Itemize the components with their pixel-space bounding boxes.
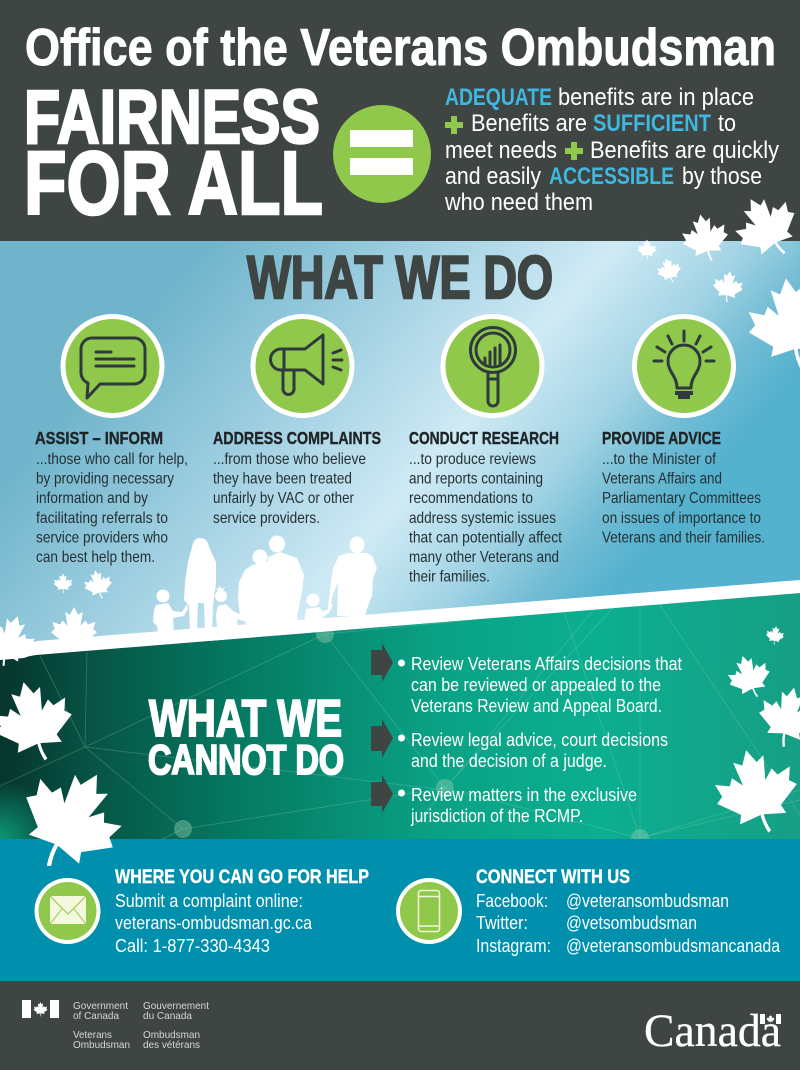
list: cannot do items: Review legal advice, court decisions xyxy=(411,729,668,750)
illustration: family silhouette xyxy=(153,536,377,632)
text block: fairness definition: to xyxy=(718,110,736,137)
heading: fairness for all xyxy=(24,75,323,234)
text block: conduct research: ...to produce reviews xyxy=(409,451,536,468)
heading: what we cannot do: CANNOT DO xyxy=(148,736,344,783)
text block: conduct research: CONDUCT RESEARCH xyxy=(409,428,559,448)
icons: maple leaves right of green panel xyxy=(706,625,800,843)
text block: provide advice: PROVIDE ADVICE xyxy=(602,428,721,448)
text block: government signature: des vétérans xyxy=(143,1039,200,1051)
text block: where you can go for help: Submit a complaint online: xyxy=(115,891,303,911)
list: cannot do items xyxy=(398,653,682,826)
text block: fairness definition: meet needs xyxy=(445,137,557,164)
text block: provide advice: Parliamentary Committees xyxy=(602,490,761,507)
text block: assist inform: service providers who xyxy=(36,529,168,546)
text block: provide advice: on issues of importance to xyxy=(602,510,761,527)
text block: where you can go for help: Call: 1-877-330-4343 xyxy=(115,936,270,956)
text block: address complaints: unfairly by VAC or other xyxy=(213,490,355,507)
list: cannot do items: jurisdiction of the RCMP. xyxy=(410,805,583,826)
text block: government signature: Gouvernement xyxy=(143,1000,209,1012)
icon: megaphone xyxy=(250,314,354,418)
text block: fairness definition: ADEQUATE xyxy=(445,84,552,111)
text block: assist inform: ASSIST – INFORM xyxy=(35,428,163,448)
list: cannot do items: Review Veterans Affairs decisions that xyxy=(411,653,682,674)
text block: provide advice xyxy=(602,428,765,546)
text block: government signature: du Canada xyxy=(143,1010,192,1022)
panel: what we do background xyxy=(0,241,800,641)
text block: provide advice: ...to the Minister of xyxy=(602,451,716,468)
text block: provide advice: Veterans Affairs and xyxy=(602,471,722,488)
text block: conduct research: their families. xyxy=(409,569,490,586)
text block: address complaints: ...from those who believe xyxy=(213,451,366,468)
text block: connect with us: @veteransombudsman xyxy=(566,891,729,911)
arrow 3 xyxy=(371,775,393,813)
logo: Canada wordmark: Canada xyxy=(644,1005,781,1057)
text block: assist inform: by providing necessary xyxy=(36,471,174,488)
panel: footer xyxy=(0,981,800,1070)
text block: connect with us: CONNECT WITH US xyxy=(476,866,630,888)
heading: what we do: WHAT WE DO xyxy=(247,244,553,311)
band: white slanted divider xyxy=(0,580,800,660)
text block: assist inform: facilitating referrals to xyxy=(36,510,168,527)
text block: where you can go for help: veterans-ombudsman.gc.ca xyxy=(115,913,313,933)
text block: connect with us xyxy=(476,866,781,956)
list: cannot do items: Veterans Review and Appeal Board. xyxy=(411,695,662,716)
arrow 1 xyxy=(371,643,393,682)
heading: fairness for all: FAIRNESS xyxy=(24,75,320,160)
text block: government signature: Ombudsman xyxy=(73,1039,130,1051)
text block: where you can go for help: WHERE YOU CAN GO FOR HELP xyxy=(115,866,369,888)
text block: conduct research: and reports containing xyxy=(409,471,543,488)
text block: government signature: of Canada xyxy=(73,1010,119,1022)
text block: fairness definition: by those xyxy=(682,163,762,190)
text block: assist inform: information and by xyxy=(36,490,148,507)
text block: address complaints: ADDRESS COMPLAINTS xyxy=(213,428,381,448)
icons: maple leaves left of green panel xyxy=(0,608,81,770)
icons: maple leaves lower left of blue panel xyxy=(51,567,115,655)
text block: fairness definition: and easily xyxy=(445,163,541,190)
text block: conduct research: that can potentially affect xyxy=(409,529,562,546)
text block: connect with us: Twitter: xyxy=(476,913,528,933)
panel: header background xyxy=(0,0,800,241)
text block: fairness definition xyxy=(444,84,779,216)
text block: address complaints: service providers. xyxy=(213,510,320,527)
text block: conduct research: address systemic issues xyxy=(409,510,556,527)
panel: contact band xyxy=(0,839,800,981)
icon: light bulb xyxy=(632,314,736,418)
logo: government of Canada flag xyxy=(22,1000,59,1018)
text block: connect with us: @vetsombudsman xyxy=(566,913,697,933)
decorative network nodes xyxy=(174,625,649,847)
icon: equals sign in green circle xyxy=(333,105,431,203)
heading: fairness for all: FOR ALL xyxy=(24,134,323,234)
text block: fairness definition: SUFFICIENT xyxy=(593,110,711,137)
decorative network lines xyxy=(0,590,800,840)
text block: address complaints: they have been treated xyxy=(213,471,352,488)
text block: provide advice: Veterans and their families. xyxy=(602,529,765,546)
text block: where you can go for help xyxy=(115,866,369,956)
list: cannot do items: and the decision of a judge. xyxy=(411,750,607,771)
text block: fairness definition: ACCESSIBLE xyxy=(549,163,674,190)
text block: connect with us: Instagram: xyxy=(476,936,551,956)
icon: speech bubble xyxy=(60,314,164,418)
text block: government signature: Veterans xyxy=(73,1029,112,1041)
panel: what we cannot do background xyxy=(0,593,800,840)
text block: conduct research: many other Veterans and xyxy=(409,549,559,566)
text block: connect with us: Facebook: xyxy=(476,891,548,911)
text block: government signature: Ombudsman xyxy=(143,1029,200,1041)
text block: government signature xyxy=(73,1000,209,1051)
text block: fairness definition: who need them xyxy=(444,189,593,216)
heading: what we cannot do xyxy=(148,690,344,783)
list: cannot do items: Review matters in the exclusive xyxy=(411,784,637,805)
text block: fairness definition: Benefits are quickly xyxy=(590,137,779,164)
icon: smartphone xyxy=(396,878,462,944)
text block: fairness definition: benefits are in place xyxy=(558,84,754,111)
heading: what we cannot do: WHAT WE xyxy=(149,690,342,748)
icons: maple leaves top right xyxy=(638,184,800,375)
list: cannot do items: can be reviewed or appealed to the xyxy=(411,674,661,695)
text block: government signature: Government xyxy=(73,1000,128,1012)
icon: envelope xyxy=(34,878,100,944)
text block: address complaints xyxy=(213,428,381,527)
text block: assist inform xyxy=(35,428,188,566)
arrow 2 xyxy=(371,719,393,758)
icon: magnifying glass xyxy=(440,314,544,418)
text block: assist inform: ...those who call for help, xyxy=(36,451,188,468)
text block: conduct research: recommendations to xyxy=(409,490,533,507)
text block: conduct research xyxy=(409,428,562,586)
text block: assist inform: can best help them. xyxy=(36,549,155,566)
text block: fairness definition: Benefits are xyxy=(471,110,587,137)
icon: large maple leaf over contact band xyxy=(2,750,140,890)
